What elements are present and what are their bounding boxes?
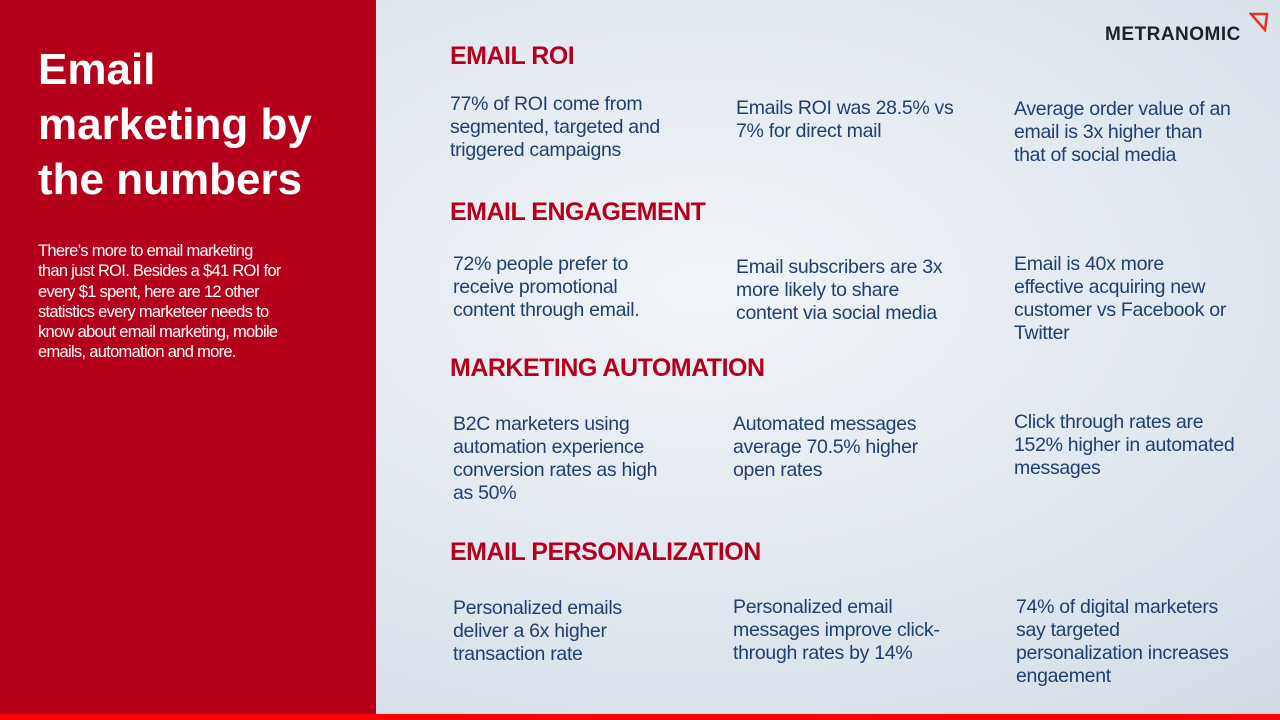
stat: say targeted bbox=[1016, 619, 1120, 641]
stat: 152% higher in automated bbox=[1014, 434, 1234, 456]
intro text: know about email marketing, mobile bbox=[38, 323, 277, 341]
intro text: every $1 spent, here are 12 other bbox=[38, 283, 259, 301]
heading: engagement: EMAIL ENGAGEMENT bbox=[450, 198, 705, 226]
stat: personalization increases bbox=[1016, 642, 1229, 664]
stat bbox=[736, 97, 953, 142]
stat: 7% for direct mail bbox=[736, 120, 881, 142]
intro text bbox=[38, 242, 281, 361]
stat bbox=[453, 597, 622, 665]
stat: open rates bbox=[733, 459, 822, 481]
heading: automation: MARKETING AUTOMATION bbox=[450, 354, 765, 382]
stat: Personalized emails bbox=[453, 597, 622, 619]
stat: effective acquiring new bbox=[1014, 276, 1205, 298]
stat: Click through rates are bbox=[1014, 411, 1203, 433]
stat: engaement bbox=[1016, 665, 1111, 687]
logo bbox=[1105, 12, 1268, 45]
title bbox=[38, 45, 312, 204]
stat: 74% of digital marketers bbox=[1016, 596, 1218, 618]
bottom red bar bbox=[0, 714, 1280, 720]
stat: 77% of ROI come from bbox=[450, 93, 642, 115]
stat bbox=[1014, 98, 1231, 166]
intro text: There’s more to email marketing bbox=[38, 242, 253, 260]
stat bbox=[450, 93, 660, 161]
stat: deliver a 6x higher bbox=[453, 620, 607, 642]
stat: more likely to share bbox=[736, 279, 899, 301]
stat: receive promotional bbox=[453, 276, 617, 298]
stat: that of social media bbox=[1014, 144, 1176, 166]
stat: Twitter bbox=[1014, 322, 1069, 344]
title: Email bbox=[38, 45, 155, 94]
stat bbox=[736, 256, 942, 324]
stat bbox=[733, 413, 918, 481]
stat: messages improve click- bbox=[733, 619, 940, 641]
stat: conversion rates as high bbox=[453, 459, 657, 481]
stat: messages bbox=[1014, 457, 1100, 479]
stat: content via social media bbox=[736, 302, 937, 324]
stat bbox=[1014, 411, 1234, 479]
title: the numbers bbox=[38, 155, 302, 204]
stat bbox=[453, 413, 657, 504]
stat: B2C marketers using bbox=[453, 413, 629, 435]
stat: Automated messages bbox=[733, 413, 916, 435]
stat: average 70.5% higher bbox=[733, 436, 918, 458]
stat: Email is 40x more bbox=[1014, 253, 1164, 275]
stat: Emails ROI was 28.5% vs bbox=[736, 97, 953, 119]
intro text: than just ROI. Besides a $41 ROI for bbox=[38, 262, 281, 280]
heading: email roi: EMAIL ROI bbox=[450, 42, 574, 70]
stat: Personalized email bbox=[733, 596, 892, 618]
stat: 72% people prefer to bbox=[453, 253, 628, 275]
intro text: statistics every marketeer needs to bbox=[38, 303, 268, 321]
title: marketing by bbox=[38, 100, 312, 149]
stat: segmented, targeted and bbox=[450, 116, 660, 138]
stat bbox=[733, 596, 940, 664]
stat: as 50% bbox=[453, 482, 516, 504]
stat: transaction rate bbox=[453, 643, 583, 665]
stat: Email subscribers are 3x bbox=[736, 256, 942, 278]
stat bbox=[453, 253, 639, 321]
stat: content through email. bbox=[453, 299, 639, 321]
stat: through rates by 14% bbox=[733, 642, 912, 664]
intro text: emails, automation and more. bbox=[38, 343, 236, 361]
stat: email is 3x higher than bbox=[1014, 121, 1202, 143]
heading: personalization: EMAIL PERSONALIZATION bbox=[450, 538, 761, 566]
stat: Average order value of an bbox=[1014, 98, 1231, 120]
stat: automation experience bbox=[453, 436, 644, 458]
stat bbox=[1014, 253, 1226, 344]
stat bbox=[1016, 596, 1229, 687]
logo: METRANOMIC bbox=[1105, 24, 1241, 45]
panel: left red intro bbox=[0, 0, 376, 714]
stat: customer vs Facebook or bbox=[1014, 299, 1226, 321]
stat: triggered campaigns bbox=[450, 139, 621, 161]
